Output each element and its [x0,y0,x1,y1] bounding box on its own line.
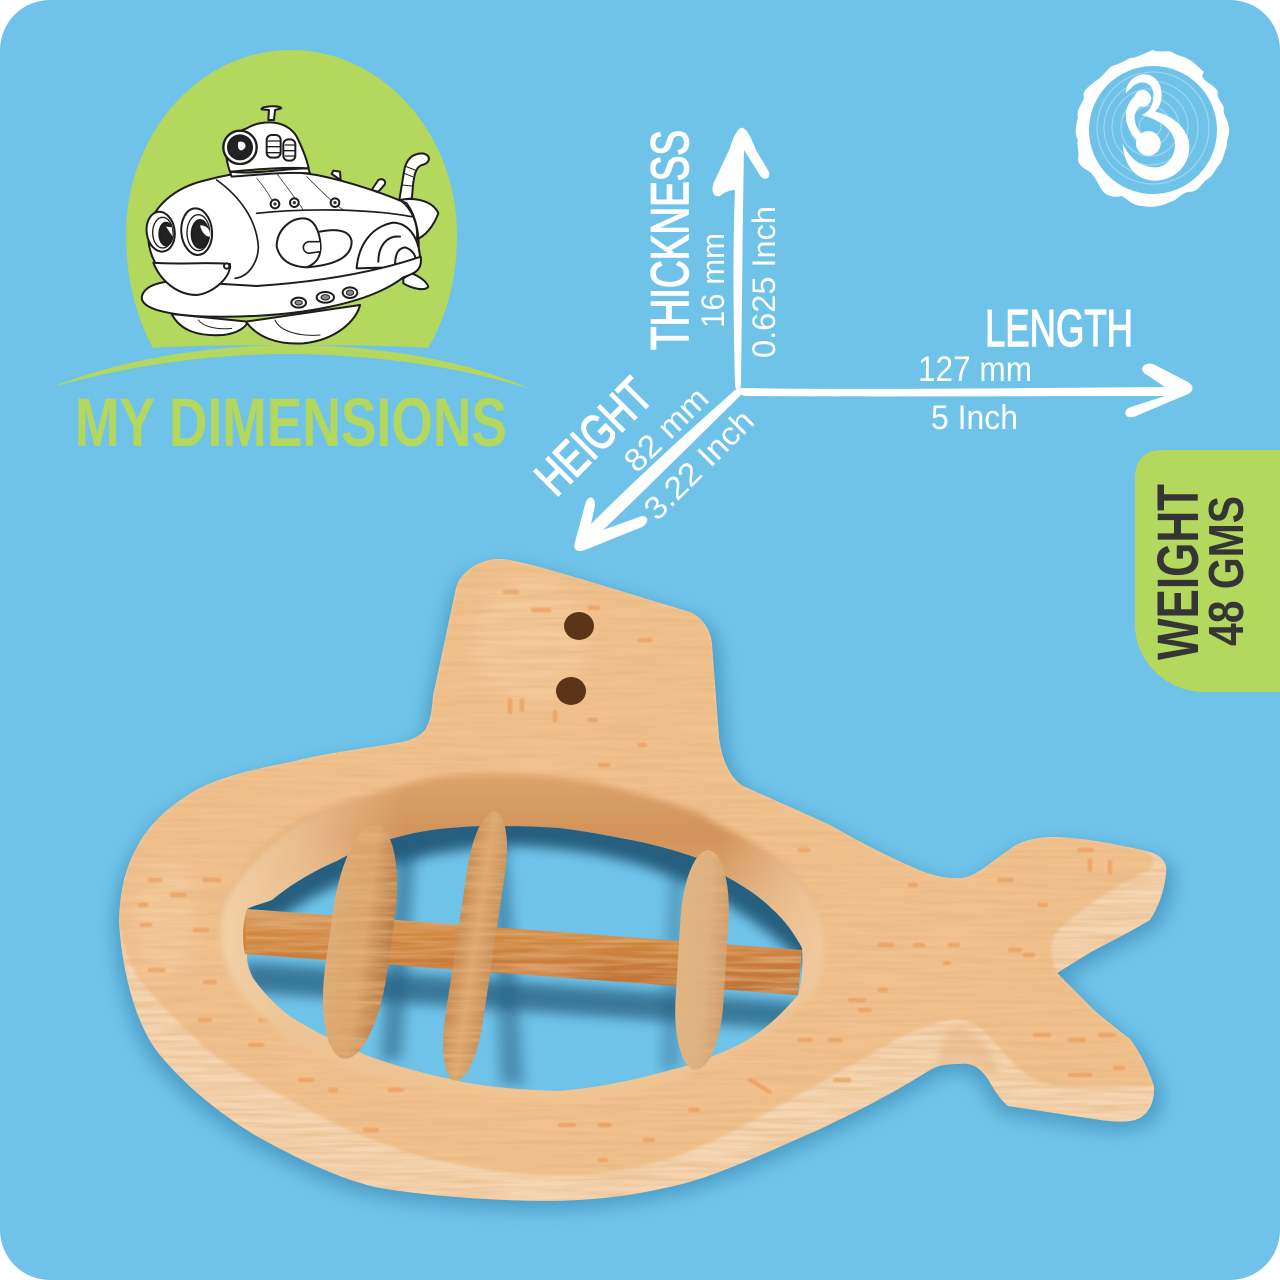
chamfer side light [220,773,826,1100]
label: 127 mm: 127 mm [918,350,1032,389]
tower vents [267,135,281,158]
hole shadows [220,790,830,1085]
wood grain [110,550,1180,1210]
arrow: length axis [739,364,1192,417]
mouth plate [153,263,230,295]
weight label: WEIGHT [1146,484,1211,660]
notch side wall shading [935,1026,1000,1075]
label: HEIGHT: HEIGHT [524,367,663,506]
hole chamfer [220,773,826,1100]
label: LENGTH: LENGTH [985,300,1133,358]
toy top face [119,559,1154,1175]
toy highlights [135,580,585,980]
label: 5 Inch: 5 Inch [931,399,1018,437]
side hatch [277,218,352,267]
icon: cartoon submarine [142,106,438,344]
weight value: 48 GMS [1200,496,1254,646]
tail fin [403,273,428,289]
hole opening [247,826,802,1091]
bolts [271,200,279,208]
product photo: wooden submarine rattle [110,550,1180,1210]
disc left [313,821,407,1063]
label: 0.625 Inch: 0.625 Inch [746,206,782,358]
icon: round brand logo [1076,50,1229,207]
disc right [671,849,733,1071]
main hull [148,171,419,287]
rod [243,909,802,995]
ground swoosh [53,345,530,389]
arrow: thickness axis [713,128,769,390]
panel: my dimensions badge [53,50,530,389]
rod and disc grain [240,800,810,1090]
toy shadow [114,566,1174,1210]
wood flecks [140,592,1123,1160]
green dome [126,50,457,348]
arrow: height axis [574,389,741,551]
lower pods [172,314,247,335]
conning tower [226,122,309,172]
logo disc [1089,66,1217,194]
tower holes [556,612,594,705]
label: 82 mm: 82 mm [616,380,715,479]
toy side wall [119,559,1166,1201]
label: THICKNESS: THICKNESS [641,130,700,350]
small deck fins [332,171,385,192]
engine housing [357,223,420,268]
eyes [146,210,176,253]
tower porthole [223,131,257,164]
label: 16 mm: 16 mm [695,233,731,328]
label: 3.22 Inch: 3.22 Inch [636,402,761,527]
disc middle [436,809,514,1083]
logo blob [1076,50,1229,207]
title: MY DIMENSIONS: MY DIMENSIONS [75,384,507,461]
periscope [399,153,429,200]
tail cone [400,199,438,240]
logo numeral [1123,74,1189,181]
logo rings [1097,72,1209,184]
portholes on deck [291,298,306,308]
fin deck [142,257,421,317]
panel: weight tag [1135,450,1280,692]
